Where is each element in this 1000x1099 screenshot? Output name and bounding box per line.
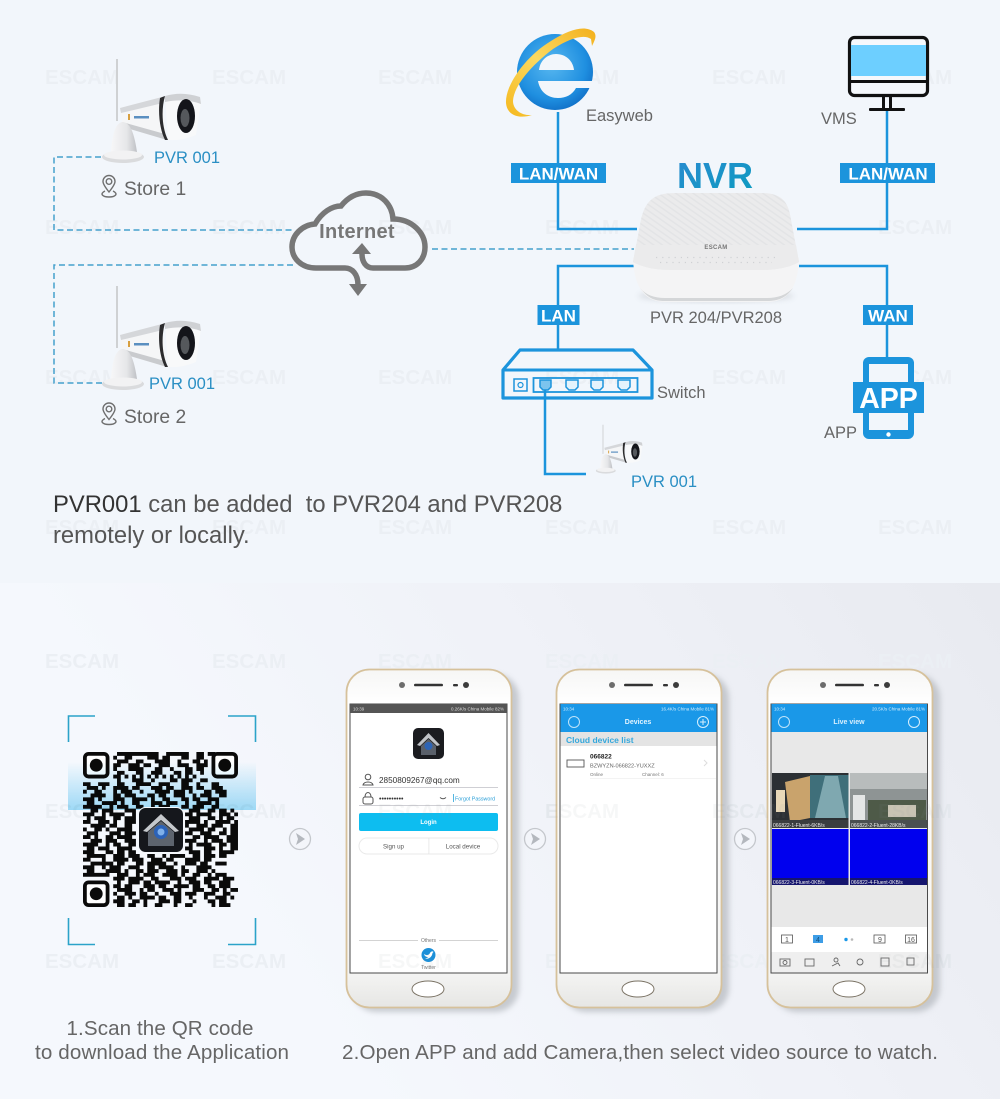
video tile 2 [850, 773, 927, 829]
background: top panel [0, 0, 1000, 583]
icon: Internet cloud [292, 193, 425, 296]
camera: local [596, 425, 642, 474]
status bar [350, 704, 507, 713]
caption: step 2: 2.Open APP and add Camera,then select video source to watch. [342, 1041, 938, 1064]
ESCAM watermarks: ESCAM [212, 366, 286, 389]
ESCAM watermarks: ESCAM [45, 216, 119, 239]
ESCAM watermarks: ESCAM [545, 800, 619, 823]
video tile 1 [772, 773, 848, 829]
ESCAM watermarks: ESCAM [45, 516, 119, 539]
device: NVR recorder [633, 193, 799, 302]
video tile 3: 066822-3-Fluent-0KB/s [773, 880, 825, 886]
ESCAM watermarks: ESCAM [378, 950, 452, 973]
arrow: step 2 to 3 [524, 828, 546, 850]
icon: location pin store 1 [102, 176, 116, 197]
app bar: Devices: 16.4K/s China Mobile 81% [661, 706, 714, 712]
toolbar icons [772, 952, 927, 972]
login button [359, 813, 498, 831]
layout selector: 1 [785, 937, 789, 944]
video tile 4 [850, 829, 927, 886]
others and twitter: Others [421, 938, 436, 944]
heading: NVR: NVR [677, 155, 753, 196]
caption: step 1 [35, 1017, 289, 1064]
text block: description: PVR001 can be added to PVR204 and PVR208 [53, 491, 562, 518]
label: APP: APP [824, 424, 857, 442]
label: PVR 204/PVR208: PVR 204/PVR208 [650, 309, 782, 327]
ESCAM watermarks: ESCAM [45, 366, 119, 389]
camera: store 1 [102, 59, 201, 163]
QR code [83, 754, 238, 905]
arrow: step 1 to 2 [290, 828, 310, 850]
ESCAM watermarks: ESCAM [878, 650, 952, 673]
tag: WAN: WAN [868, 306, 908, 326]
device row: BZWYZN-066822-YUXXZ [590, 764, 655, 770]
app bar: Live view: 20.5K/s China Mobile 81% [872, 706, 925, 712]
status bar: 10:39 [353, 706, 365, 712]
ESCAM watermarks: ESCAM [545, 366, 619, 389]
label: Easyweb: Easyweb [586, 107, 653, 125]
ESCAM watermarks: ESCAM [212, 650, 286, 673]
icon: Internet cloud: Internet [319, 221, 395, 243]
tag: LAN/WAN left: LAN/WAN [519, 164, 598, 184]
ESCAM watermarks: ESCAM [45, 950, 119, 973]
status bar: 0.26K/s China Mobile 82% [451, 706, 504, 712]
app bar: Devices [560, 704, 716, 732]
label: PVR 001 store 2: PVR 001 [149, 375, 215, 393]
ESCAM watermarks: ESCAM [45, 650, 119, 673]
app bar: Live view: Live view [833, 719, 865, 726]
ESCAM watermarks: ESCAM [878, 216, 952, 239]
ESCAM watermarks: ESCAM [712, 950, 786, 973]
icon: VMS monitor [850, 38, 928, 111]
sign up and local device: Local device [446, 844, 481, 850]
label: Store 1: Store 1 [124, 179, 186, 200]
ESCAM watermarks: ESCAM [878, 66, 952, 89]
phone 1: login screen [346, 670, 519, 1012]
device row: 066822 [590, 754, 612, 760]
app bar: Devices: 10:34 [563, 706, 575, 712]
section: Cloud device list: Cloud device list [566, 735, 634, 745]
label: Store 2: Store 2 [124, 407, 186, 428]
ESCAM watermarks over phone screens: ESCAM [378, 800, 452, 823]
icon: APP tablet [853, 357, 924, 439]
ESCAM watermarks over phone screens: ESCAM [878, 800, 952, 823]
ESCAM watermarks over phone screens: ESCAM [878, 950, 952, 973]
ESCAM watermarks: ESCAM [712, 516, 786, 539]
layout selector: 16 [907, 937, 915, 944]
device row [567, 754, 716, 779]
video tile 1: 066822-1-Fluent-6KB/s [773, 823, 825, 829]
ESCAM watermarks: ESCAM [378, 650, 452, 673]
ESCAM watermarks: ESCAM [712, 650, 786, 673]
ESCAM watermarks: ESCAM [378, 366, 452, 389]
section: Cloud device list [560, 732, 716, 746]
video tile 3 [772, 829, 848, 886]
camera: store 2 [102, 286, 201, 390]
icon: app logo in QR [138, 808, 184, 852]
ESCAM watermarks: ESCAM [712, 800, 786, 823]
arrow: step 3 to 4 [734, 828, 756, 850]
label: Switch: Switch [657, 384, 706, 402]
ESCAM watermarks: ESCAM [45, 66, 119, 89]
ESCAM watermarks over phone screens: ESCAM [712, 800, 786, 823]
ESCAM watermarks over phone screens: ESCAM [545, 800, 619, 823]
others and twitter: Twitter [421, 965, 436, 971]
tag: LAN: LAN [541, 306, 576, 326]
device row: Online [590, 772, 604, 777]
ESCAM watermarks: ESCAM [212, 66, 286, 89]
ESCAM watermarks: ESCAM [878, 516, 952, 539]
video tile 4: 066822-4-Fluent-0KB/s [851, 880, 903, 886]
password field: Forgot Password [455, 796, 495, 802]
background: bottom panel [0, 583, 1000, 1099]
caption: step 1: to download the Application [35, 1041, 289, 1064]
layout selector [772, 927, 927, 952]
ESCAM watermarks: ESCAM [212, 950, 286, 973]
QR scan highlight band [68, 762, 256, 810]
tag: LAN/WAN right: LAN/WAN [848, 164, 928, 184]
ESCAM watermarks: ESCAM [545, 650, 619, 673]
password field: •••••••••• [379, 796, 404, 803]
ESCAM watermarks: ESCAM [878, 950, 952, 973]
label: PVR 001 store 1: PVR 001 [154, 149, 220, 167]
app bar: Devices: Devices [625, 719, 651, 726]
ESCAM watermarks: ESCAM [378, 516, 452, 539]
icon: location pin store 2 [102, 403, 116, 424]
ESCAM watermarks: ESCAM [878, 800, 952, 823]
caption: step 1: 1.Scan the QR code [66, 1017, 254, 1040]
ESCAM watermarks: ESCAM [545, 516, 619, 539]
phone 2: device list screen [556, 670, 729, 1012]
username field: 2850809267@qq.com [379, 776, 460, 785]
device: NVR recorder: ESCAM [704, 245, 728, 251]
ESCAM watermarks: ESCAM [212, 516, 286, 539]
ESCAM watermarks over phone screens: ESCAM [378, 950, 452, 973]
layout selector: 4 [816, 937, 820, 944]
ESCAM watermarks: ESCAM [212, 800, 286, 823]
layout selector: 9 [878, 937, 882, 944]
others and twitter [359, 937, 498, 971]
ESCAM watermarks: ESCAM [712, 366, 786, 389]
sign up and local device [359, 838, 498, 854]
ESCAM watermarks: ESCAM [45, 800, 119, 823]
app bar: Live view [772, 704, 927, 732]
icon: Internet Explorer logo [506, 29, 597, 117]
icon: network switch [503, 350, 652, 398]
ESCAM watermarks [45, 66, 952, 973]
login button: Login [420, 820, 437, 826]
label: PVR 001 local: PVR 001 [631, 473, 697, 491]
ESCAM watermarks: ESCAM [712, 216, 786, 239]
QR scan frame [68, 716, 256, 944]
label: VMS: VMS [821, 110, 857, 128]
ESCAM watermarks: ESCAM [212, 216, 286, 239]
ESCAM watermarks: ESCAM [878, 366, 952, 389]
ESCAM watermarks: ESCAM [378, 800, 452, 823]
app bar: Live view: 10:34 [774, 706, 786, 712]
text block: description [53, 491, 562, 549]
sign up and local device: Sign up [383, 844, 405, 850]
ESCAM watermarks: ESCAM [545, 66, 619, 89]
dashed connection lines: stores to internet to NVR [54, 157, 634, 383]
ESCAM watermarks: ESCAM [378, 66, 452, 89]
app icon [413, 728, 444, 759]
icon: APP tablet: APP [859, 383, 918, 415]
phone 3: live view screen [768, 670, 940, 1012]
video tile 2: 066822-2-Fluent-28KB/s [851, 823, 906, 829]
ESCAM watermarks: ESCAM [545, 950, 619, 973]
password field [359, 792, 498, 806]
ESCAM watermarks: ESCAM [545, 216, 619, 239]
username field [359, 774, 498, 788]
ESCAM watermarks over phone screens [378, 800, 952, 973]
text block: description: remotely or locally. [53, 522, 250, 549]
ESCAM watermarks: ESCAM [378, 216, 452, 239]
solid connection lines: NVR to clients [545, 110, 887, 474]
ESCAM watermarks: ESCAM [712, 66, 786, 89]
device row: Channel: 6 [642, 772, 664, 777]
